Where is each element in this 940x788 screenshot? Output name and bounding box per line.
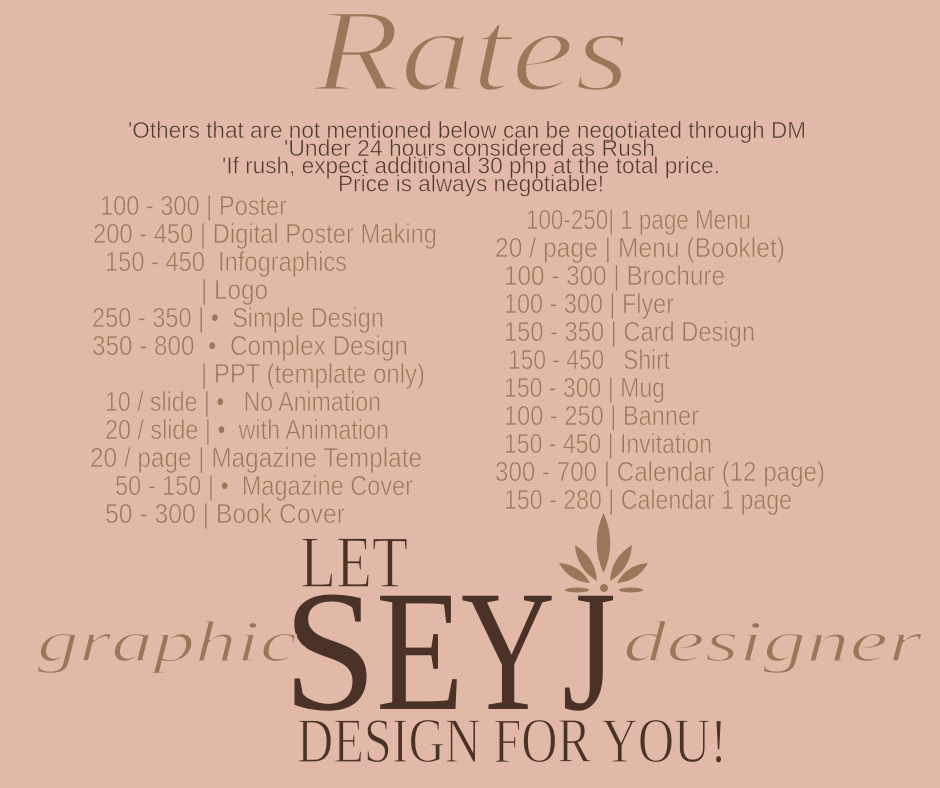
price list: right column: 100 - 300 | Brochure — [504, 260, 725, 291]
price list: right column: 150 - 450 | Invitation — [504, 428, 712, 459]
price list: right column: 20 / page | Menu (Booklet) — [495, 232, 785, 263]
text block: notes: 'Under 24 hours considered as Rush — [284, 135, 655, 161]
price list: left column: | Logo — [201, 274, 268, 305]
price list: right column: 300 - 700 | Calendar (12 page) — [495, 456, 825, 487]
logo wordmark: SEYJ: J — [562, 556, 616, 747]
price list: left column: 250 - 350 | • Simple Design — [92, 302, 384, 333]
heading: DESIGN FOR YOU!: DESIGN FOR YOU! — [297, 705, 727, 776]
price list: left column: 100 - 300 | Poster — [100, 190, 287, 221]
price list: right column: 150 - 300 | Mug — [504, 372, 665, 403]
price list: left column: 50 - 300 | Book Cover — [105, 498, 345, 529]
logo wordmark: SEYJ: E — [376, 556, 464, 747]
logo wordmark: SEYJ — [283, 556, 616, 747]
price list: left column: 20 / slide | • with Animation — [105, 414, 389, 445]
price list: left column: 350 - 800 • Complex Design — [92, 330, 408, 361]
logo wordmark: SEYJ: Y — [461, 556, 555, 747]
price list: right column: 100 - 250 | Banner — [504, 400, 699, 431]
text block: notes: Price is always negotiable! — [338, 170, 604, 196]
price list: left column — [90, 190, 437, 529]
price list: right column: 150 - 350 | Card Design — [504, 316, 755, 347]
text block: notes: 'If rush, expect additional 30 php at the total price. — [222, 152, 720, 178]
script label: designer: designer — [623, 609, 923, 674]
price list: left column: | PPT (template only) — [201, 358, 425, 389]
price list: right column: 150 - 450 Shirt — [508, 344, 670, 375]
price list: left column: 150 - 450 Infographics — [105, 246, 347, 277]
script label: graphic: graphic — [37, 609, 297, 674]
price list: left column: 20 / page | Magazine Template — [90, 442, 422, 473]
price list: right column: 100 - 300 | Flyer — [504, 288, 674, 319]
text block: notes: 'Others that are not mentioned below can be negotiated through DM — [128, 117, 806, 143]
price list: left column: 10 / slide | • No Animation — [105, 386, 381, 417]
price list: right column: 150 - 280 | Calendar 1 page — [504, 484, 792, 515]
heading: LET: LET — [300, 522, 408, 604]
icon: leaf ornament — [559, 513, 648, 592]
price list: left column: 50 - 150 | • Magazine Cover — [115, 470, 413, 501]
price list: right column: 100-250| 1 page Menu — [526, 204, 751, 235]
price list: right column — [495, 204, 825, 515]
logo wordmark: SEYJ: S — [283, 556, 377, 747]
price list: left column: 200 - 450 | Digital Poster Making — [93, 218, 437, 249]
text block: notes — [128, 117, 806, 196]
